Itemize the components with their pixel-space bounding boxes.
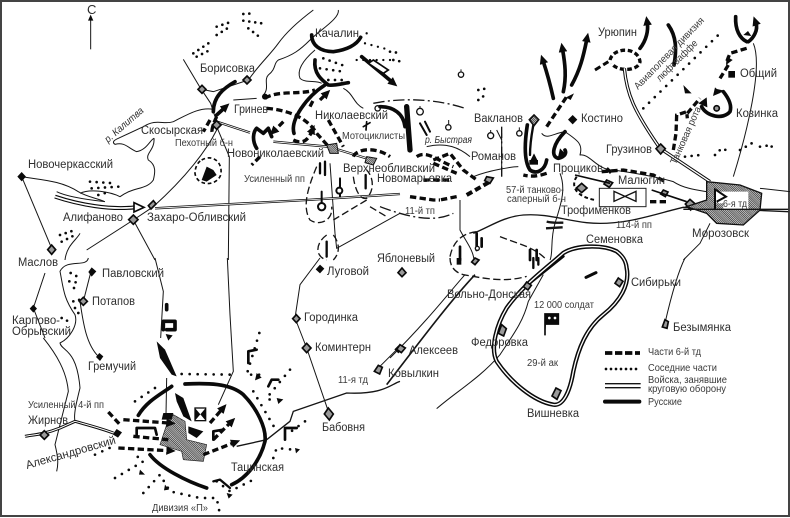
- german attack dashes: [195, 90, 390, 260]
- unit labels: Мотоциклисты: [342, 131, 405, 142]
- unit labels: Усиленный 4-й пп: [28, 400, 104, 411]
- encircled battle box: [599, 188, 646, 207]
- place names: Грузинов: [606, 144, 652, 156]
- wood clumps: [60, 13, 397, 242]
- unit labels: Пехотный б-н: [175, 137, 233, 149]
- legend symbols: [605, 353, 641, 402]
- legend: Русские: [648, 397, 682, 408]
- unit labels: 57-й танково-: [506, 185, 564, 196]
- place names: Павловский: [102, 268, 164, 280]
- settlements: [17, 76, 380, 254]
- place names: Качалин: [315, 28, 359, 40]
- unit labels: 12 000 солдат: [534, 300, 594, 311]
- place names: Борисовка: [200, 63, 256, 75]
- place names: Безымянка: [673, 322, 732, 334]
- attacking columns: [108, 305, 297, 488]
- dotted neighbours: [62, 273, 305, 515]
- place names: Бабовня: [322, 422, 365, 434]
- legend: Части 6-й тд: [648, 347, 701, 358]
- unit labels: 11-й тп: [405, 206, 435, 217]
- place names: Сибирьки: [631, 277, 681, 289]
- place names: Новочеркасский: [28, 159, 113, 171]
- place names: Карпово-: [12, 315, 60, 327]
- map: south-east sector, pocket of 29th corps: [387, 247, 685, 409]
- russian front lines: [213, 35, 392, 148]
- settlements: [30, 265, 402, 439]
- place names: Общий: [740, 68, 777, 80]
- river names: р. Быстрая: [424, 135, 473, 146]
- place names: Потапов: [92, 296, 135, 308]
- place names: Романов: [471, 151, 516, 163]
- place names: Ковылкин: [388, 368, 439, 380]
- unit labels: 6-я тд: [723, 199, 747, 210]
- place names: Верхнеобливский: [343, 163, 435, 175]
- unit labels: Танковая рота: [669, 105, 704, 166]
- ring around Tatsinskaya: [138, 384, 265, 488]
- tatsinskaya town: [160, 415, 207, 461]
- legend: [648, 347, 727, 408]
- place names: Яблоневый: [377, 253, 435, 265]
- place names: Гринев: [234, 104, 268, 116]
- attack dashes and dotted neighbours: [390, 48, 772, 202]
- legend: круговую оборону: [648, 383, 726, 395]
- place names: Гремучий: [88, 361, 136, 373]
- place names: Федоровка: [471, 337, 529, 349]
- map: north-east sector: [373, 17, 790, 260]
- dash-dot and dashed sectors: [373, 100, 545, 260]
- place names: Козинка: [736, 108, 779, 120]
- place names: Николаевский: [315, 110, 388, 122]
- unit labels: 29-й ак: [527, 358, 559, 369]
- settlements: [485, 71, 735, 210]
- place names: Урюпин: [598, 27, 637, 39]
- legend: Войска, занявшие: [648, 375, 727, 386]
- place names: Семеновка: [586, 234, 644, 246]
- unit labels: саперный б-н: [507, 193, 566, 205]
- place names: Обрывский: [12, 326, 71, 338]
- place names: Проциков: [553, 163, 603, 175]
- place names: Александровский: [25, 435, 117, 472]
- airfield symbol: [195, 408, 206, 421]
- pocket ring: [494, 247, 627, 405]
- breakout arrows: [380, 17, 757, 172]
- double roads: [55, 122, 400, 212]
- map: north-west sector: [17, 10, 400, 260]
- place names: Малюгин: [618, 175, 665, 187]
- place names: Вакланов: [474, 113, 523, 125]
- place names: Захаро-Обливский: [147, 212, 246, 224]
- thin rivers and roads: [427, 132, 790, 260]
- river names: р. Калитва: [102, 105, 146, 146]
- place names: Тацинская: [231, 462, 284, 474]
- place names: Вольно-Донская: [447, 289, 531, 301]
- unit labels: Дивизия «П»: [152, 503, 208, 514]
- roads and river: [387, 256, 685, 409]
- unit labels: люфтваффе: [654, 37, 701, 84]
- map: south-west sector, Tatsinskaya: [25, 258, 402, 515]
- place names: Вишневка: [527, 408, 580, 420]
- place names: Трофименков: [561, 205, 631, 217]
- morozovsk: [683, 182, 788, 225]
- artillery and position symbols: [417, 31, 751, 165]
- place names: Алифаново: [63, 212, 123, 224]
- place names: Новомарьевка: [377, 173, 453, 185]
- legend: Соседние части: [648, 363, 717, 374]
- rivers and roads: [25, 258, 400, 471]
- place names: Новониколаевский: [227, 148, 324, 160]
- place names: Городинка: [304, 312, 359, 324]
- place names: Костино: [581, 113, 623, 125]
- rivers and roads: [22, 10, 400, 260]
- unit labels: Авиаполевая дивизия: [632, 15, 707, 92]
- place names: Скосырская: [141, 125, 203, 137]
- north arrow: [88, 15, 93, 49]
- place names: Алексеев: [409, 345, 458, 357]
- river names: [102, 105, 473, 146]
- unit labels: Усиленный пп: [244, 174, 305, 185]
- place names: Луговой: [327, 266, 369, 278]
- uryupin strongpoint and road to Morozovsk: [595, 33, 756, 182]
- icon: corps flag: [545, 314, 558, 335]
- north label: С: [87, 2, 96, 17]
- unit labels: 11-я тд: [338, 375, 368, 386]
- railway: [473, 207, 788, 233]
- place names: Маслов: [18, 257, 58, 269]
- place names: Коминтерн: [315, 342, 371, 354]
- place names: Жирнов: [28, 415, 68, 427]
- russian position: [586, 273, 596, 277]
- settlements: [397, 258, 668, 399]
- place names: Морозовск: [692, 228, 750, 240]
- unit labels: 114-й пп: [616, 220, 652, 231]
